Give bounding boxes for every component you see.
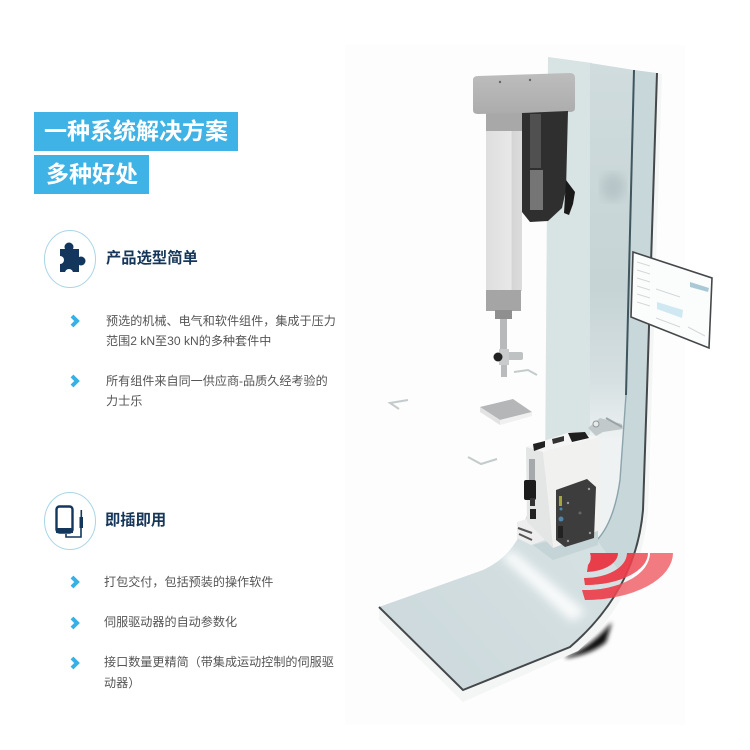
electric actuator (473, 73, 575, 319)
heading: simple product selection: 产品选型简单 (106, 250, 198, 267)
red wireless signal (582, 553, 673, 600)
glass column left strip (545, 57, 592, 480)
title line 2: 多种好处 (46, 161, 138, 187)
bullet chevron 4 (70, 616, 80, 630)
glass column smudge (601, 173, 625, 201)
bullet chevron 5 (70, 656, 80, 670)
bullet text 2: 力士乐 (106, 394, 142, 408)
software monitor (631, 252, 712, 348)
bullet text 5: 动器） (104, 676, 140, 690)
bullet text 2 (106, 374, 328, 408)
title line 1: 一种系统解决方案 (44, 118, 228, 144)
floor shadow (566, 622, 612, 658)
pale area right of drive (590, 440, 624, 545)
floor highlight (500, 550, 586, 622)
white outer plate of curved column (379, 73, 662, 702)
bullet text 1: 范围2 kN至30 kN的多种套件中 (106, 334, 271, 348)
bullet chevron 2 (70, 374, 80, 388)
glass column right strip following the curve (597, 70, 657, 575)
small L brackets (390, 370, 537, 464)
servo drive (517, 432, 600, 560)
title line 1 (34, 112, 238, 151)
glass column centre strip (590, 63, 634, 440)
bullet text 4: 伺服驱动器的自动参数化 (104, 615, 237, 629)
bullet chevron 1 (70, 314, 80, 328)
title line 2 (34, 155, 149, 194)
actuator rod and tool (494, 319, 523, 377)
soft backdrop behind column (345, 45, 685, 725)
bullet text 5: 接口数量更精简（带集成运动控制的伺服驱 (104, 655, 334, 669)
curved glass floor (379, 390, 647, 690)
heading: plug and play: 即插即用 (105, 512, 166, 529)
illustration: servo press system on curved glass column (378, 57, 713, 702)
bullet chevron 3 (70, 576, 80, 588)
safety module (556, 479, 596, 547)
icon: phone with cable (44, 492, 96, 550)
bullet text 3: 打包交付，包括预装的操作软件 (104, 575, 273, 589)
servo motor (522, 111, 575, 222)
bullet text 2: 所有组件来自同一供应商-品质久经考验的 (106, 374, 328, 388)
icon: puzzle piece (44, 230, 96, 288)
bullet text 1: 预选的机械、电气和软件组件，集成于压力 (106, 314, 336, 328)
bullet text 1 (106, 314, 336, 348)
grey pressure plate (480, 399, 532, 425)
column dark edge lines (379, 70, 657, 690)
glass bracket (588, 418, 623, 436)
bullet text 5 (104, 655, 334, 690)
